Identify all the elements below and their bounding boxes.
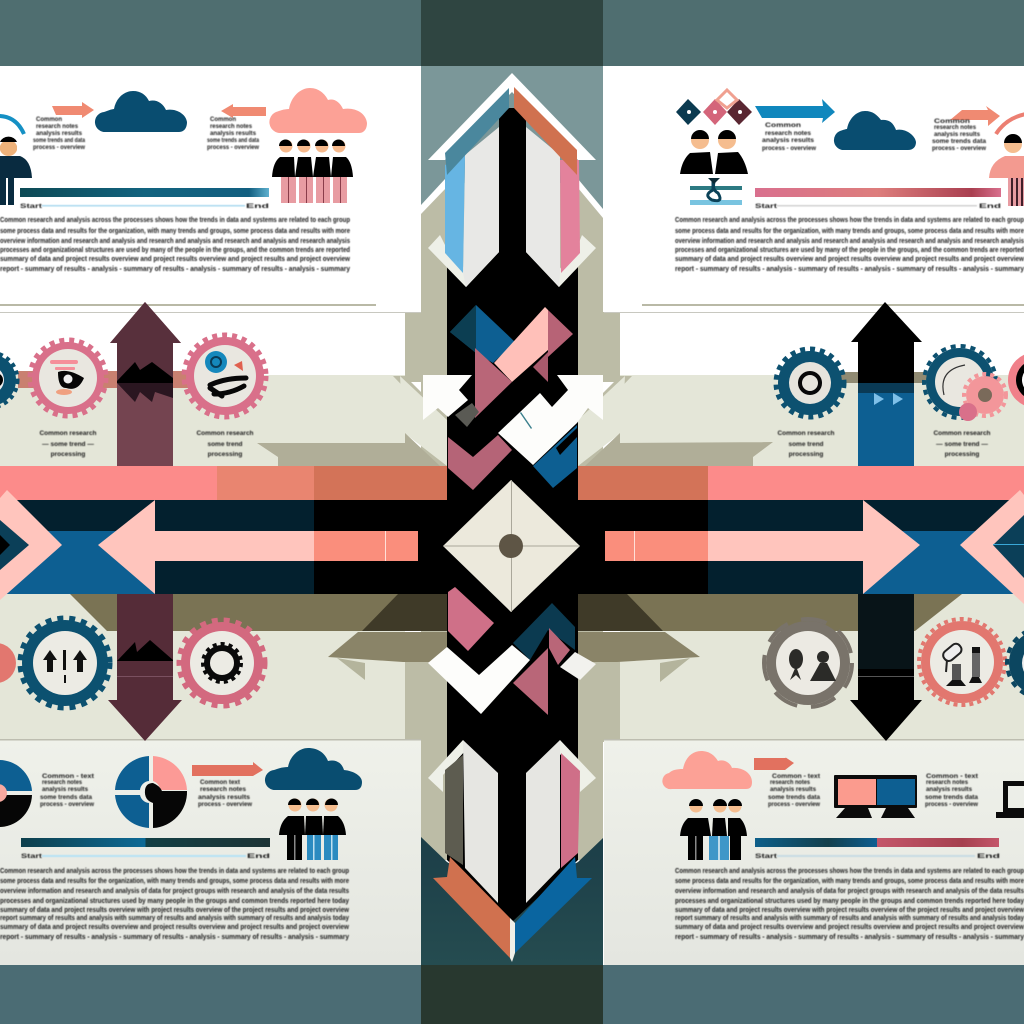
bottom left gray strip: [445, 755, 463, 865]
gear: upper far left teal: [0, 353, 17, 407]
top right light panel: [526, 127, 560, 287]
arrow: left pointing pink: [98, 500, 418, 594]
center black strip on blue: [556, 428, 577, 455]
mini text block: some trends and data: [33, 138, 86, 144]
arrow: salmon: [192, 762, 263, 776]
body text: some process data and results for the organization, with many trends and groups, some process data and results with more: [0, 878, 349, 885]
mini text block: analysis results: [198, 795, 251, 801]
center blue diamond: [450, 305, 515, 363]
arrow: lower left down maroon: [108, 594, 182, 741]
mini text block: [33, 117, 86, 151]
lower rose square: [448, 587, 494, 651]
mini text block: Common text: [200, 780, 240, 786]
arrow: right pointing pink: [605, 500, 920, 594]
body text: Common research and analysis across the processes shows how the trends in data and systems are related to each group: [0, 217, 350, 224]
gear: small pink: [959, 374, 1006, 421]
mini text block: analysis results: [210, 131, 257, 137]
gear: lower far right teal: [1007, 628, 1024, 698]
gear labels: upper right: — some trend —: [936, 441, 988, 448]
progress scale: Start: [20, 204, 42, 210]
gear: lower right coral: [919, 619, 1005, 705]
arrow: salmon: [950, 106, 1000, 126]
mini text block: process - overview: [932, 146, 986, 152]
center blue shard: [533, 425, 577, 488]
gear: lower far left pink: [0, 643, 16, 683]
mini text block: [207, 117, 260, 151]
mini text block: analysis results: [42, 787, 89, 793]
center rose chevron: [448, 435, 512, 490]
mini text block: some trends data: [40, 795, 93, 801]
icon: blue signal arc: [0, 116, 24, 134]
body text: [675, 217, 1024, 273]
bottom right pink strip: [561, 753, 580, 868]
gear: upper center pink: [184, 335, 266, 417]
mini text block: process - overview: [40, 802, 94, 808]
ribbon: lower left olive: [70, 594, 447, 680]
gear: upper right teal: [776, 349, 844, 417]
mini text block: process - overview: [33, 145, 85, 151]
top left teal band: [445, 88, 509, 175]
mini text block: process - overview: [768, 802, 820, 808]
gear labels: upper right: Common research: [777, 430, 835, 437]
icon: two figures: [789, 649, 836, 681]
icon: group of four people: [272, 140, 353, 203]
mini text block: research notes: [770, 780, 811, 786]
mini text block: analysis results: [762, 138, 815, 144]
gear labels: upper left: — some trend —: [42, 441, 94, 448]
dividers: [0, 304, 1024, 740]
mini text block: analysis results: [770, 787, 817, 793]
ribbon: lower right olive: [578, 594, 962, 682]
ribbon: upper right olive: [585, 433, 773, 466]
gear labels: upper right: Common research: [933, 430, 991, 437]
mini text block: some trends data: [932, 139, 987, 145]
icon: person left: [0, 137, 32, 205]
arrow: upper left up maroon: [110, 302, 181, 466]
bottom blue band: [515, 857, 592, 953]
body text: some process data and results for the organization, with many trends and groups, some process data and results with more: [0, 228, 350, 235]
gear labels: upper left: some trend: [207, 441, 243, 448]
top left light panel: [463, 127, 499, 287]
mini text block: Common: [934, 119, 970, 125]
icon: group of three people: [680, 799, 747, 860]
mini text block: research notes: [200, 787, 247, 793]
bottom right light panel: [526, 740, 560, 903]
icon: navy cloud: [265, 748, 362, 790]
body text: summary of data and project results overview with project results overview of the project results and project overview: [0, 907, 349, 914]
gear: lower center pink: [179, 620, 265, 706]
progress bar: [755, 188, 1001, 197]
bottom left white outline: [428, 740, 466, 792]
top white chevron: [428, 73, 596, 160]
body text: report summary of results and analysis with summary of results and analysis with summary of results and analysis today: [0, 915, 349, 922]
mini text block: research notes: [42, 780, 83, 786]
progress scale: [755, 854, 1001, 860]
icon: laptop: [996, 781, 1024, 818]
gear labels: upper right: processing: [789, 451, 823, 458]
arrow: lower right down black: [850, 594, 922, 741]
teal hairline on white band: [520, 412, 532, 429]
gear: lower right gray: [764, 619, 852, 707]
mini text block: Common: [210, 117, 236, 123]
gear labels: upper right: some trend: [788, 441, 824, 448]
connector strips: upper gears: [18, 371, 970, 388]
central black column: [447, 108, 578, 922]
lower small white arrow: [560, 652, 596, 680]
gear labels: upper left: Common research: [196, 430, 254, 437]
bottom left light panel: [463, 740, 498, 903]
horizontal band: salmon left: [0, 466, 447, 500]
icon: person right: [989, 134, 1024, 206]
horizontal band: navy right: [578, 500, 1024, 594]
mini text block: Common: [36, 117, 62, 123]
top left blue strip: [445, 155, 465, 273]
icon: navy cloud: [834, 111, 916, 150]
gear labels: upper right: processing: [945, 451, 979, 458]
mini text block: analysis results: [926, 787, 973, 793]
mini text block: research notes: [934, 125, 977, 131]
horizontal band: salmon right: [578, 466, 1024, 500]
gear labels: upper left: [39, 430, 254, 458]
body text: overview information and research and analysis and research and analysis and research and analysis and research analysis: [0, 238, 350, 245]
mini text block: [932, 119, 987, 152]
progress scale: Start: [755, 204, 777, 210]
body text: summary of data and project results overview and project results overview and project results and project overview: [0, 924, 349, 931]
icon: blue dot and marks: [205, 351, 246, 396]
body text: Common research and analysis across the processes shows how the trends in data and systems are related to each group: [0, 868, 349, 875]
horizontal band: navy left: [0, 500, 447, 594]
progress scale: [21, 854, 271, 860]
white arrow left: [423, 375, 472, 420]
progress scale: Start: [21, 854, 42, 860]
panel: bottom left: [0, 740, 421, 965]
chart: pie: [115, 756, 187, 828]
mini text block: [925, 774, 979, 808]
panel: top right: [604, 66, 1024, 312]
icon: two people: [680, 130, 748, 174]
body text: processes and organizational structures used by many people in the groups and common trends reported here today: [0, 898, 349, 905]
top right white outline: [526, 235, 596, 287]
top left white outline: [428, 235, 499, 287]
chevron: far left pink: [0, 490, 62, 600]
top header band: [0, 0, 1024, 66]
mini text block: Common - text: [926, 774, 978, 780]
bottom orange band: [433, 857, 510, 958]
progress scale: End: [977, 854, 1001, 860]
lower white chevron: [428, 645, 530, 714]
center small rose triangle: [533, 352, 548, 382]
icon: people up arrows: [43, 650, 87, 683]
progress bar: [20, 188, 269, 197]
arrow: salmon left: [221, 104, 266, 118]
progress scale: End: [979, 204, 1002, 210]
mini text block: some trends data: [925, 795, 979, 801]
top right pink strip: [560, 160, 580, 273]
icon: salmon cloud: [662, 751, 752, 789]
mini text block: [768, 774, 821, 808]
mini text block: process - overview: [207, 145, 259, 151]
arrow: upper right up black and blue: [851, 302, 922, 466]
white arrow right with band: [498, 375, 603, 465]
center rose diamond: [548, 310, 573, 357]
mini text block: some trends and data: [207, 138, 260, 144]
central background column: [421, 66, 603, 965]
icon: three diamonds: [676, 90, 752, 125]
icon: eye in gear: [50, 360, 84, 395]
body text: [0, 217, 350, 273]
mini text block: Common: [765, 123, 801, 129]
mini text block: process - overview: [762, 146, 816, 152]
body text: [675, 868, 1024, 941]
icon: knot with bars: [690, 178, 742, 205]
progress scale: End: [246, 204, 270, 210]
gear: lower left teal: [20, 618, 110, 708]
mini text block: analysis results: [934, 132, 981, 138]
chart: pie partial: [0, 760, 32, 827]
icon: tools: [941, 642, 982, 686]
progress scale: Start: [755, 854, 777, 860]
bottom footer band: [0, 965, 1024, 1024]
mini text block: Common - text: [42, 774, 94, 780]
body text: processes and organizational structures are used by many of the people in the groups, and the common trends are reported: [0, 247, 350, 254]
icon: dual monitor: [834, 775, 917, 818]
progress bar: [755, 838, 999, 847]
cream mid sections: [0, 312, 1024, 742]
mini text block: some trends data: [768, 795, 821, 801]
mini text block: research notes: [36, 124, 79, 130]
gear labels: upper left: Common research: [39, 430, 97, 437]
mini text block: Common - text: [772, 774, 820, 780]
icon: salmon cloud: [269, 88, 367, 133]
body text: report - summary of results - analysis - summary of results - analysis - summary of results - analysis - summary: [0, 934, 349, 941]
gear: upper far right teal with pink: [924, 346, 1006, 421]
progress scale: [755, 204, 1002, 210]
lower small rose shard: [549, 628, 570, 665]
mini text block: [40, 774, 94, 808]
center rose triangle: [475, 348, 512, 418]
progress bar: [21, 838, 270, 847]
arrow: salmon to cloud: [52, 102, 94, 118]
chevron: far right pink: [960, 490, 1024, 604]
bottom white tip: [510, 918, 515, 962]
mini text block: research notes: [210, 124, 253, 130]
mini text block: research notes: [926, 780, 969, 786]
body text: [0, 868, 349, 941]
mini text block: process - overview: [198, 802, 252, 808]
lower teal chevron: [513, 603, 575, 660]
lower rose triangle: [513, 648, 548, 715]
panel: top left: [0, 66, 421, 312]
progress scale: End: [247, 854, 271, 860]
mini text block: analysis results: [36, 131, 83, 137]
body text: overview information and research and analysis of data for project groups with research and analysis of the data results: [0, 888, 349, 895]
body text: report - summary of results - analysis - summary of results - analysis - summary of results - analysis - summary: [0, 266, 350, 273]
icon: salmon arc: [996, 114, 1024, 134]
arrow: salmon: [754, 757, 794, 770]
icon: group of three people: [279, 798, 346, 860]
center light pink band: [494, 307, 548, 382]
gear: upper right edge: [1008, 352, 1024, 408]
mini text block: [198, 780, 252, 808]
gear labels: upper left: processing: [51, 451, 85, 458]
bottom right white outline: [556, 740, 596, 792]
mini text block: process - overview: [925, 802, 978, 808]
mini text block: [762, 123, 816, 152]
progress scale: [20, 204, 270, 210]
gear labels: upper left: processing: [208, 451, 242, 458]
gear: upper left pink: [30, 340, 106, 416]
ribbon: upper left olive: [257, 433, 440, 466]
icon: navy cloud: [95, 91, 187, 132]
top right orange band: [514, 87, 577, 175]
center hub diamond: [443, 480, 580, 612]
mini text block: research notes: [765, 131, 812, 137]
body text: summary of data and project results overview and project results overview and project results and project overview: [0, 256, 350, 263]
arrow: blue: [755, 99, 835, 123]
panel: bottom right: [604, 740, 1024, 965]
gray center shard: [455, 403, 479, 427]
gear labels: upper right: [777, 430, 991, 458]
